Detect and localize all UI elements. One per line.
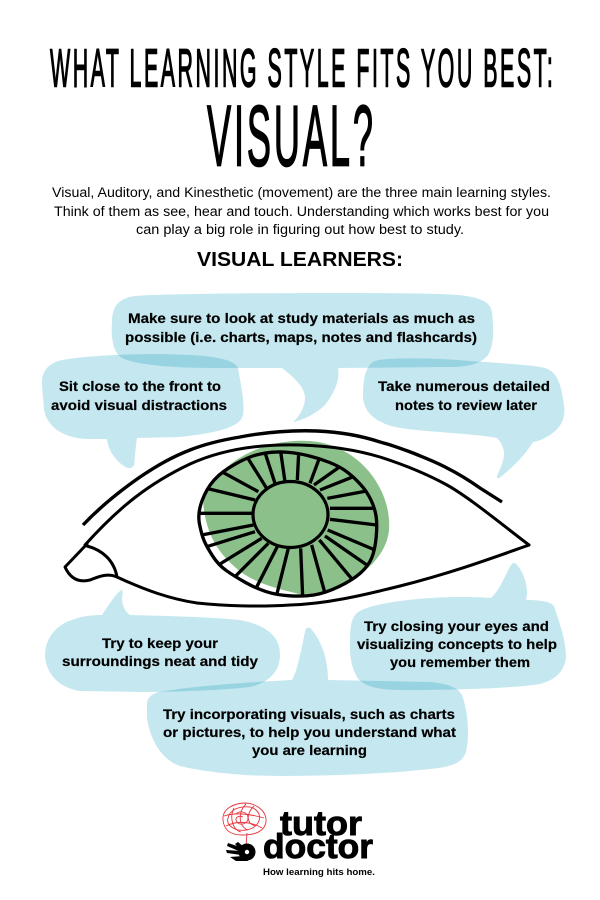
logo wordmark: tutor — [280, 805, 362, 843]
title: VISUAL? — [207, 87, 373, 184]
text: sit close: avoid visual distractions — [51, 398, 227, 414]
text: look at study materials — [125, 311, 477, 346]
text: take notes — [378, 379, 550, 414]
bubble: take detailed notes — [363, 358, 564, 478]
intro text block: can play a big role in figuring out how best to study. — [136, 222, 464, 237]
text: look at study materials: Make sure to look at study materials as much as — [128, 311, 475, 327]
text: incorporating visuals: or pictures, to help you understand what — [163, 725, 456, 741]
logo: tutor doctor — [223, 803, 375, 877]
text: incorporating visuals: you are learning — [252, 743, 367, 759]
text: closing eyes: you remember them — [390, 655, 530, 671]
bubble: sit close to the front — [42, 354, 244, 468]
title: WHAT LEARNING STYLE FITS YOU BEST: — [50, 38, 553, 98]
icon: red brain scribble — [223, 803, 266, 846]
heading: visual learners: VISUAL LEARNERS: — [197, 249, 403, 271]
intro text block: Visual, Auditory, and Kinesthetic (movement) are the three main learning styles. — [52, 185, 551, 200]
lower lid — [117, 545, 529, 606]
text: sit close — [51, 379, 227, 414]
bubble: incorporating visuals — [147, 628, 468, 776]
bubble texts — [51, 311, 557, 759]
text: take notes: Take numerous detailed — [378, 379, 550, 395]
text: incorporating visuals: Try incorporating visuals, such as charts — [163, 707, 455, 723]
icon: hand — [226, 842, 256, 861]
text: sit close: Sit close to the front to — [59, 379, 221, 395]
bubble: look at study materials — [112, 293, 493, 422]
iris green blob — [203, 441, 389, 595]
text: closing eyes — [357, 619, 557, 671]
iris spokes and outline — [198, 452, 377, 597]
text: incorporating visuals — [163, 707, 456, 759]
text: take notes: notes to review later — [395, 398, 537, 414]
text: closing eyes: visualizing concepts to help — [357, 637, 557, 653]
upper lid outer line — [83, 431, 502, 525]
text: closing eyes: Try closing your eyes and — [364, 619, 549, 635]
intro text block — [52, 185, 551, 237]
logo: tutor doctor: doctor — [263, 828, 373, 866]
icon: eye — [65, 431, 529, 606]
text: surroundings — [62, 636, 258, 670]
pupil — [253, 482, 328, 548]
logo tagline: How learning hits home. — [263, 867, 375, 877]
bubble: closing your eyes — [350, 563, 566, 690]
text: look at study materials: possible (i.e. charts, maps, notes and flashcards) — [125, 330, 477, 346]
tear duct — [65, 544, 117, 581]
text: surroundings: Try to keep your — [102, 636, 219, 652]
bubble: keep surroundings tidy — [45, 590, 280, 692]
upper lid inner line — [85, 445, 529, 545]
intro text block: Think of them as see, hear and touch. Understanding which works best for you — [54, 204, 549, 219]
text: surroundings: surroundings neat and tidy — [62, 654, 258, 670]
title — [50, 38, 553, 184]
